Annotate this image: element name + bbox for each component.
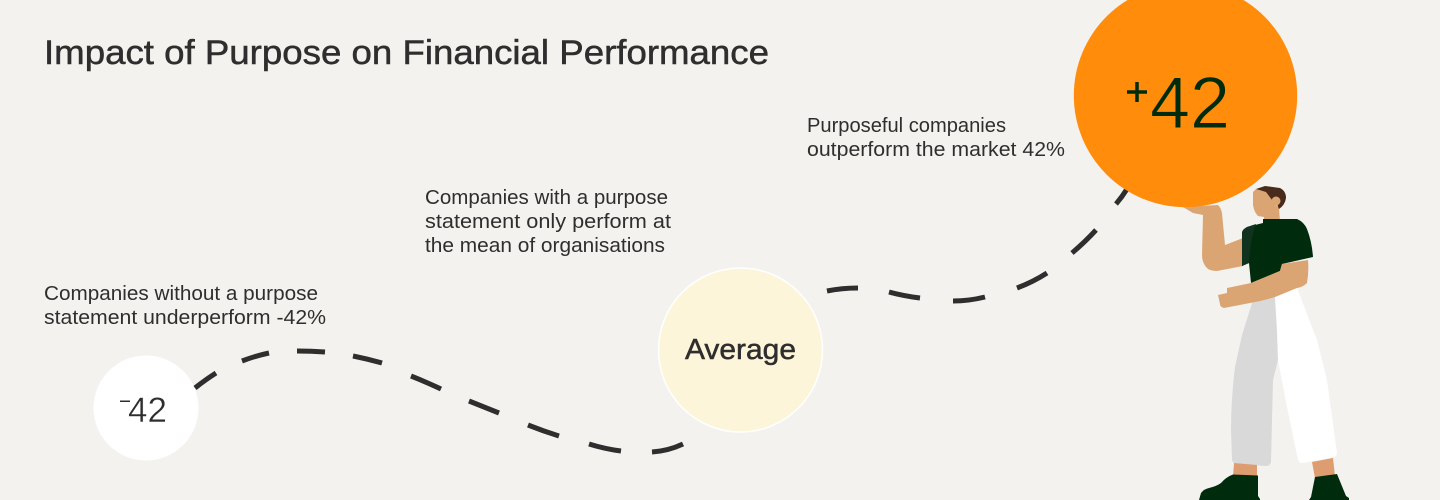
dashed trend line xyxy=(195,189,1127,452)
callout: purpose statement only: the mean of organisations xyxy=(425,235,665,257)
marker: plus 42: 42 xyxy=(1150,63,1230,144)
left trouser leg xyxy=(1231,296,1278,466)
figure: person holding circle xyxy=(1183,186,1349,500)
ear xyxy=(1272,196,1280,206)
callout: purposeful companies: outperform the market 42% xyxy=(807,139,1065,161)
title: Impact of Purpose on Financial Performance xyxy=(44,34,769,72)
callout: purposeful companies: Purposeful companies xyxy=(807,115,1006,137)
neck and face xyxy=(1253,189,1280,222)
t-shirt xyxy=(1242,219,1313,283)
callout: without purpose statement: statement underperform -42% xyxy=(44,307,326,329)
folded arm xyxy=(1218,260,1308,308)
marker: minus 42 xyxy=(94,356,198,460)
callout: purpose statement only: statement only perform at xyxy=(425,211,671,233)
t-shirt sleeve shade xyxy=(1242,224,1256,266)
ankles xyxy=(1233,458,1335,478)
shoes xyxy=(1199,474,1349,500)
marker: average: Average xyxy=(685,334,796,366)
callout: purpose statement only: Companies with a purpose xyxy=(425,187,668,209)
marker: minus 42: 42 xyxy=(128,391,167,430)
callout: purposeful companies xyxy=(807,115,1065,161)
right trouser leg xyxy=(1275,288,1337,463)
marker: plus 42 xyxy=(1074,0,1297,207)
callout: purpose statement only xyxy=(425,187,671,257)
callout: without purpose statement: Companies without a purpose xyxy=(44,283,318,305)
callout: without purpose statement xyxy=(44,283,326,329)
raised arm xyxy=(1183,205,1243,271)
hair xyxy=(1256,186,1286,209)
marker: average xyxy=(658,268,822,432)
